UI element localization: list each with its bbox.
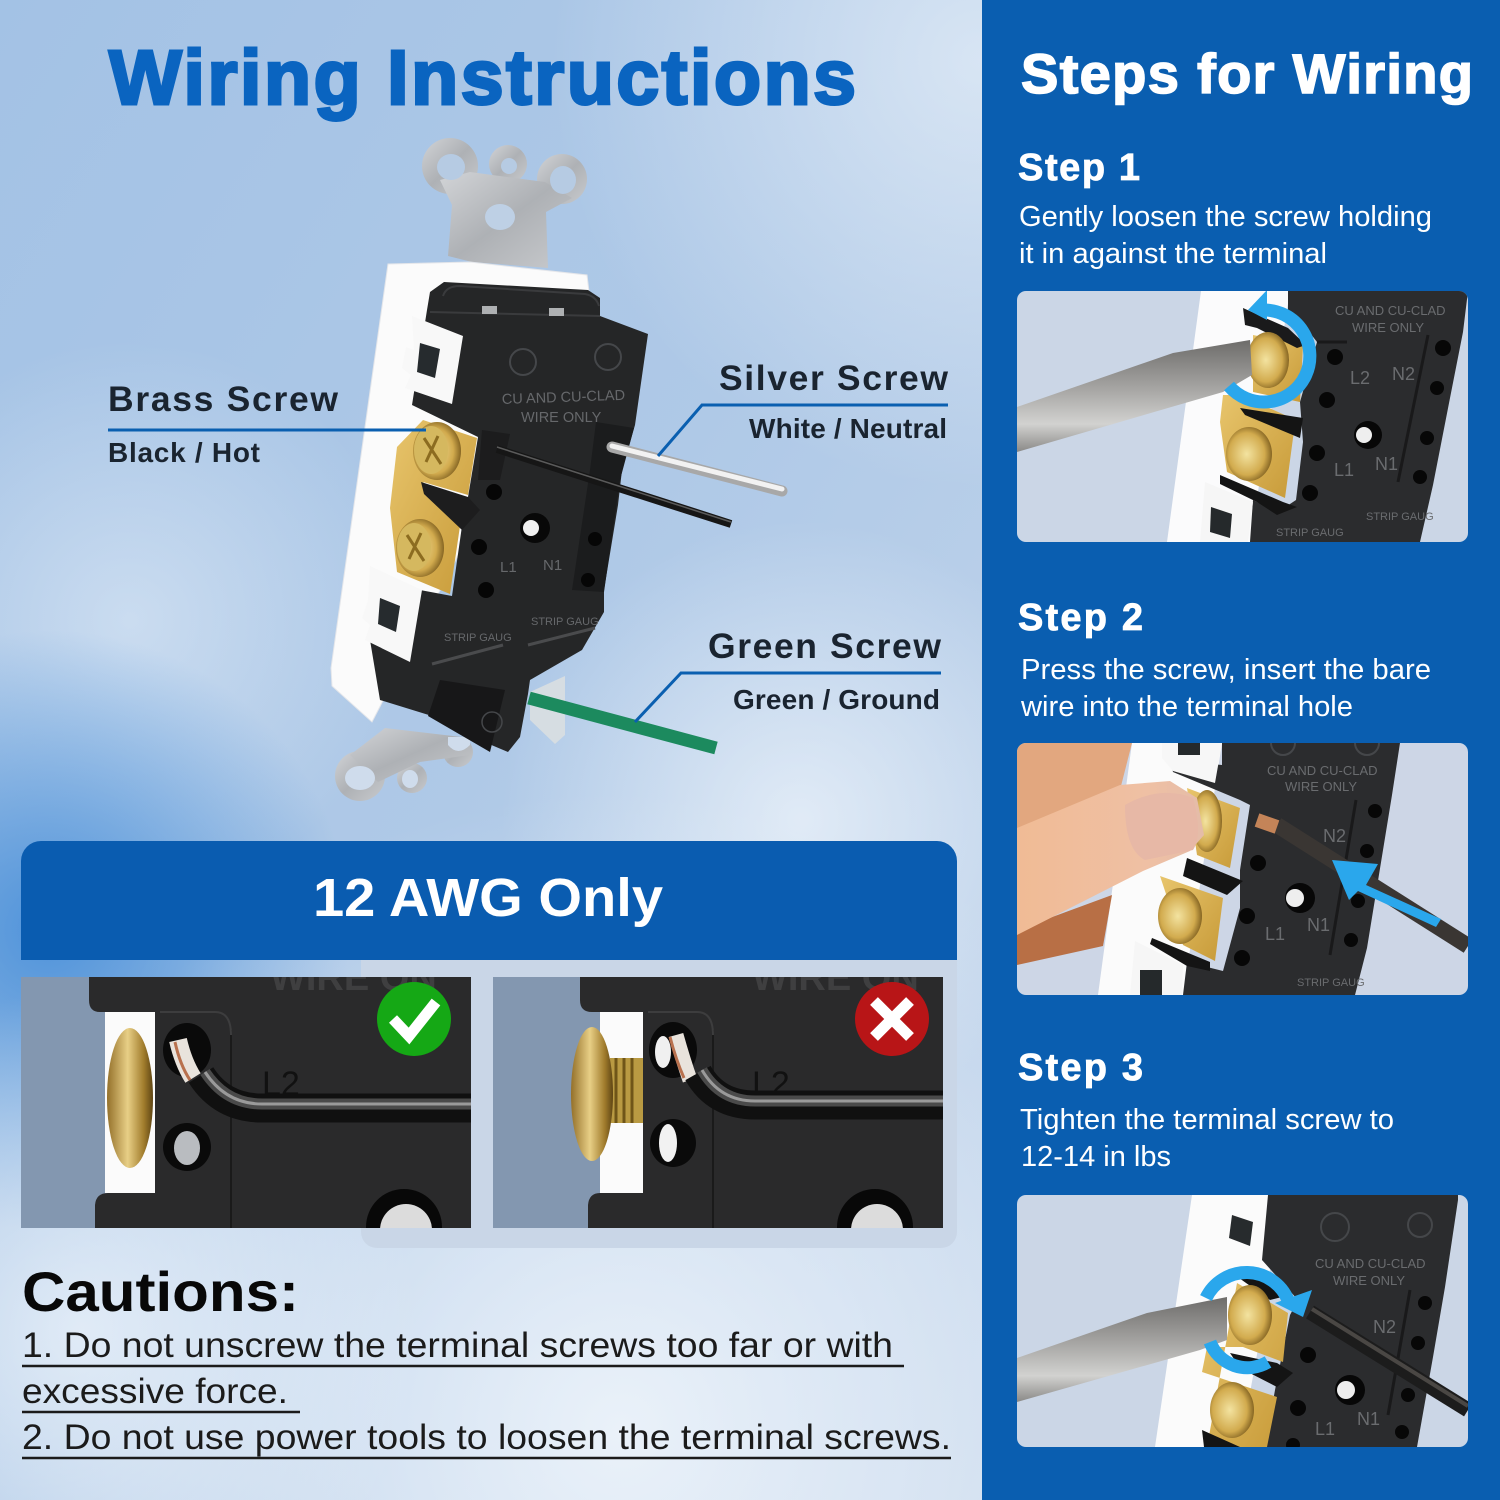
holes and markings: [1302, 340, 1451, 501]
step 2 text: Press the screw, insert the bare: [1021, 654, 1431, 686]
banner: 12 AWG Only: [21, 841, 957, 960]
label: silver screw: [658, 358, 948, 456]
terminal holes: [649, 1022, 697, 1078]
mounting strap: bottom: [335, 728, 473, 801]
step 1 photo: CU AND CU-CLAD: [1335, 303, 1446, 318]
label: green screw: [635, 626, 941, 722]
cautions: excessive force.: [22, 1372, 288, 1411]
banner: 12 AWG Only: 12 AWG Only: [313, 868, 663, 928]
step 3 photo: N2: [1373, 1317, 1396, 1337]
brass screw head: [571, 1027, 613, 1161]
step 3 photo: WIRE ONLY: [1333, 1273, 1405, 1288]
blue push arrow: [1332, 860, 1441, 927]
outlet illustration: [331, 138, 782, 801]
background: [0, 0, 982, 1500]
label: brass screw: Black / Hot: [108, 437, 260, 468]
label: brass screw: Brass Screw: [108, 379, 338, 419]
step 2 photo: L1: [1265, 924, 1285, 944]
step 2 photo: N1: [1307, 915, 1330, 935]
step 1 photo: N1: [1375, 454, 1398, 474]
label: green screw: Green Screw: [708, 626, 941, 666]
photo: incorrect wiring: L2: [752, 1065, 790, 1103]
black housing: [370, 282, 648, 752]
panel: steps for wiring: [982, 0, 1500, 1500]
ground bracket: [530, 676, 565, 744]
cautions: 2. Do not use power tools to loosen the terminal screws.: [22, 1418, 951, 1457]
screws: [1228, 1285, 1272, 1345]
brass screws: [396, 422, 461, 577]
housing details: N1: [543, 557, 562, 574]
step 3 photo: N1: [1357, 1409, 1380, 1429]
wire: [676, 1035, 690, 1080]
step 2 photo: STRIP GAUG: [1297, 977, 1365, 989]
step 1 photo: [1017, 290, 1468, 542]
terminal holes: [163, 1023, 211, 1077]
cautions: [22, 1260, 951, 1458]
wire: [1310, 1309, 1468, 1410]
screws: [1247, 332, 1289, 388]
step 1 photo: L1: [1334, 460, 1354, 480]
holes and markings: [1234, 804, 1382, 966]
holes and markings: [1286, 1296, 1432, 1452]
clips: [362, 316, 463, 662]
housing details: STRIP GAUG: [444, 632, 512, 644]
step 2 photo: [1017, 731, 1468, 995]
white clip: [1170, 744, 1222, 783]
step 3 photo: L1: [1315, 1419, 1335, 1439]
step 2 photo: WIRE ONLY: [1285, 779, 1357, 794]
wire: silver neutral: [612, 446, 782, 491]
blue rotate arrow: [1206, 1273, 1312, 1368]
housing details: STRIP GAUG: [531, 616, 599, 628]
step 2 text: wire into the terminal hole: [1020, 691, 1353, 723]
step 1 photo: STRIP GAUG: [1276, 527, 1344, 539]
brass plates: [1253, 335, 1303, 402]
hand: [1017, 743, 1204, 965]
step 3 photo: [1017, 1195, 1468, 1452]
label: silver screw: White / Neutral: [749, 413, 947, 444]
white clip: [1252, 502, 1253, 510]
step 2 photo: N2: [1323, 826, 1346, 846]
brass plate: [390, 420, 477, 594]
cautions: Cautions:: [22, 1260, 299, 1323]
heading: Steps for Wiring: [1021, 42, 1473, 105]
icon: green check: [377, 982, 451, 1056]
title: Wiring Instructions: [109, 35, 856, 121]
photo: correct wiring: L2: [262, 1065, 300, 1103]
photo: incorrect wiring: WIRE ON: [752, 957, 919, 999]
step 1 text: Step 1: [1018, 147, 1140, 189]
wire: green ground: [529, 698, 716, 748]
photo: correct wiring: [21, 977, 471, 1228]
wire: [178, 1040, 193, 1078]
photo: incorrect wiring: [493, 977, 943, 1228]
icon: red cross: [855, 982, 929, 1056]
label: silver screw: Silver Screw: [719, 358, 948, 398]
housing details: CU AND CU-CLAD: [502, 388, 625, 408]
white body: [331, 262, 590, 722]
screw threads: [610, 1058, 643, 1123]
step 3 text: [1018, 1047, 1394, 1173]
step 1 photo: STRIP GAUG: [1366, 511, 1434, 523]
blue rotate arrow: [1229, 290, 1310, 402]
brass screw head: [107, 1028, 153, 1168]
label: brass screw: [108, 379, 426, 468]
photo: correct wiring: WIRE ON: [270, 957, 437, 999]
housing details: WIRE ONLY: [521, 410, 602, 426]
step 3 text: Step 3: [1018, 1047, 1143, 1089]
cautions: 1. Do not unscrew the terminal screws too far or with: [22, 1326, 893, 1365]
pale backing panel: [361, 960, 957, 1248]
step 3 text: Tighten the terminal screw to: [1020, 1104, 1394, 1136]
step 2 photo: CU AND CU-CLAD: [1267, 763, 1378, 778]
step 2 text: Step 2: [1018, 597, 1143, 639]
clip window: [1229, 1215, 1253, 1246]
step 1 photo: L2: [1350, 368, 1370, 388]
step 1 text: Gently loosen the screw holding: [1019, 201, 1432, 233]
screwdriver: [1017, 340, 1252, 452]
step 3 text: 12-14 in lbs: [1021, 1141, 1171, 1173]
wire: [1257, 820, 1468, 946]
label: green screw: Green / Ground: [733, 684, 940, 715]
step 1 text: [1018, 147, 1432, 270]
step 1 photo: N2: [1392, 364, 1415, 384]
housing details: L1: [500, 559, 517, 576]
mounting strap: top: [422, 138, 587, 268]
screwdriver: [1017, 1297, 1227, 1402]
step 1 photo: WIRE ONLY: [1352, 320, 1424, 335]
step 2 text: [1018, 597, 1431, 723]
wire: black hot: [497, 447, 731, 524]
screws: [1196, 790, 1222, 852]
housing details: [428, 344, 634, 752]
step 3 photo: CU AND CU-CLAD: [1315, 1256, 1426, 1271]
step 1 text: it in against the terminal: [1019, 238, 1327, 270]
